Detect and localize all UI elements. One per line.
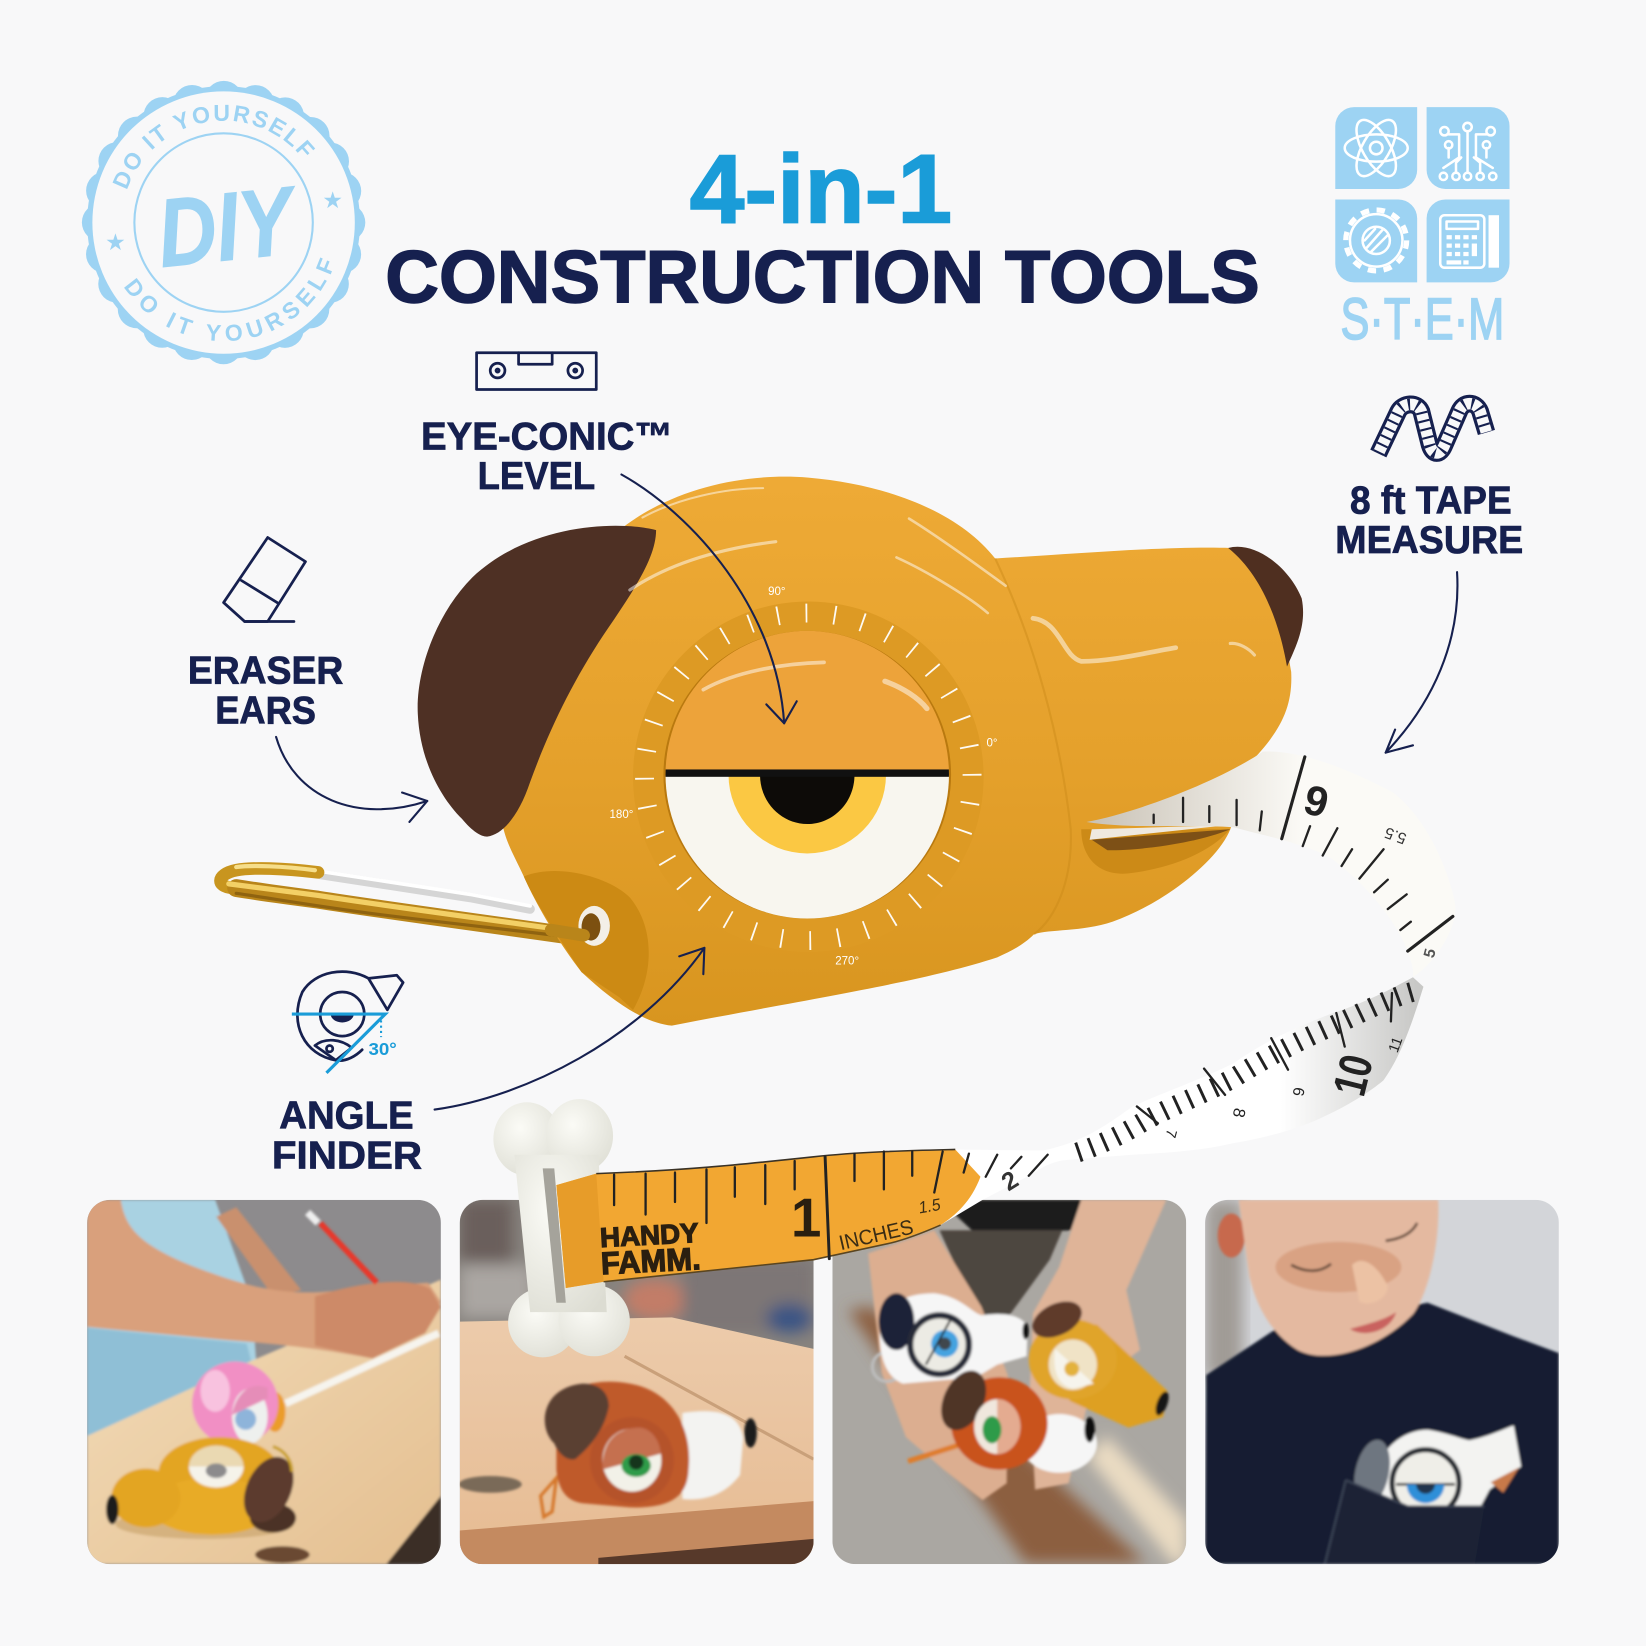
gloss highlights bbox=[630, 488, 1254, 709]
arrow to dial bbox=[435, 948, 704, 1110]
tape label 5: 5 bbox=[1421, 947, 1440, 960]
label: eye-conic: EYE-CONIC™ bbox=[421, 415, 673, 458]
white tape section: mouth to loop bbox=[1086, 751, 1455, 977]
ruler ticks bbox=[614, 1152, 969, 1259]
pocket dog bbox=[1375, 1426, 1521, 1507]
ear bbox=[418, 526, 656, 837]
dog body bbox=[502, 477, 1291, 1026]
title: construction tools: CONSTRUCTION TOOLS bbox=[385, 235, 1260, 318]
ribbon numbers: 7 bbox=[1162, 1127, 1179, 1139]
engineering tile bbox=[1335, 199, 1417, 282]
brand: Handy Famm: HANDY bbox=[599, 1217, 699, 1253]
product photo panel 1: measuring on a wood board bbox=[87, 1200, 441, 1564]
arrow to ear bbox=[276, 737, 427, 822]
technology tile bbox=[1427, 107, 1510, 189]
math tile bbox=[1427, 199, 1510, 282]
callout: angle finder bbox=[272, 948, 704, 1177]
label: level: LEVEL bbox=[478, 455, 595, 498]
inches label: INCHES bbox=[837, 1216, 916, 1255]
tape numeral 9: 9 bbox=[1299, 776, 1333, 827]
level eye bbox=[661, 628, 955, 922]
product photo panel 3: three dogs in hands bbox=[832, 1200, 1186, 1564]
ribbon numbers: 6 bbox=[1289, 1086, 1307, 1098]
carabiner recess bbox=[524, 871, 649, 1010]
white dog bbox=[880, 1293, 1028, 1384]
arrow to eye bbox=[621, 474, 797, 723]
icon: angle finder bbox=[292, 972, 403, 1073]
ribbon numbers: 11 bbox=[1386, 1035, 1406, 1055]
callout: eye-conic level bbox=[421, 353, 797, 723]
head-snout seam bbox=[995, 558, 1071, 934]
dial degree labels: 90° bbox=[768, 586, 786, 598]
dial degree labels: 270° bbox=[835, 956, 859, 968]
label: ears: EARS bbox=[215, 689, 316, 732]
dial degree labels: 0° bbox=[986, 737, 998, 749]
label: measure: MEASURE bbox=[1335, 519, 1523, 562]
carabiner hole bbox=[551, 906, 610, 946]
product photo panel 4: boy with dog in shirt pocket bbox=[1205, 1200, 1559, 1564]
dial degree labels: 180° bbox=[610, 809, 633, 821]
hero product: dog tape measure bbox=[220, 477, 1303, 1026]
icon: tape ribbon bbox=[1378, 404, 1486, 453]
white tape section: twist to orange end bbox=[941, 977, 1423, 1225]
badge text: top arc: DO IT YOURSELF bbox=[112, 104, 315, 189]
nose bbox=[1228, 547, 1303, 667]
badge text: bottom arc: DO IT YOURSELF bbox=[124, 258, 332, 341]
orange dog bbox=[908, 1445, 957, 1461]
callout: eraser ears bbox=[188, 537, 427, 822]
ribbon numbers: 8 bbox=[1229, 1107, 1249, 1119]
carabiner clip bbox=[220, 866, 583, 937]
label: eraser: ERASER bbox=[188, 649, 343, 692]
science tile bbox=[1335, 107, 1417, 189]
numeral 1: 1 bbox=[791, 1188, 821, 1249]
brand: Handy Famm: FAMM. bbox=[600, 1240, 701, 1281]
STEM wordmark: S·T·E·M bbox=[1341, 287, 1504, 352]
mouth slot and lower jaw bbox=[1081, 825, 1230, 874]
STEM logo bbox=[1335, 107, 1510, 352]
ribbon numbers: 10 bbox=[1323, 1049, 1383, 1101]
badge stars: ★ bbox=[105, 229, 126, 255]
icon: spirit level bbox=[477, 353, 596, 389]
1.5 label: 1.5 bbox=[917, 1195, 943, 1217]
badge stars bbox=[105, 187, 343, 255]
orange tape section with ruler marks bbox=[556, 1149, 980, 1288]
angle value: 30° bbox=[368, 1039, 397, 1059]
badge stars: ★ bbox=[322, 187, 343, 213]
yellow dog bbox=[1068, 1324, 1169, 1430]
eye dial ring bbox=[610, 586, 998, 968]
DIY do it yourself badge bbox=[82, 80, 366, 364]
numeral 2 on tape: 2 bbox=[997, 1166, 1023, 1197]
label: finder: FINDER bbox=[272, 1134, 422, 1177]
brand: Handy Famm bbox=[599, 1217, 701, 1281]
bone tape end bbox=[493, 1099, 630, 1357]
label: angle: ANGLE bbox=[279, 1094, 414, 1137]
icon: eraser bbox=[224, 537, 305, 621]
tape ticks bbox=[1154, 757, 1453, 951]
ribbon tick marks bbox=[1071, 992, 1412, 1155]
arrow to tape bbox=[1386, 572, 1457, 753]
tape label 5.5: 5.5 bbox=[1382, 823, 1409, 847]
callout: 8 ft tape measure bbox=[1335, 404, 1523, 753]
dial degree labels bbox=[610, 586, 998, 968]
ribbon numbers bbox=[1162, 1035, 1406, 1139]
title: 4-in-1: 4-in-1 bbox=[690, 135, 952, 244]
product photo panel 2: orange dog on wood bbox=[459, 1200, 814, 1564]
label: 8 ft tape: 8 ft TAPE bbox=[1350, 479, 1512, 522]
badge script DIY: DIY bbox=[153, 167, 304, 288]
